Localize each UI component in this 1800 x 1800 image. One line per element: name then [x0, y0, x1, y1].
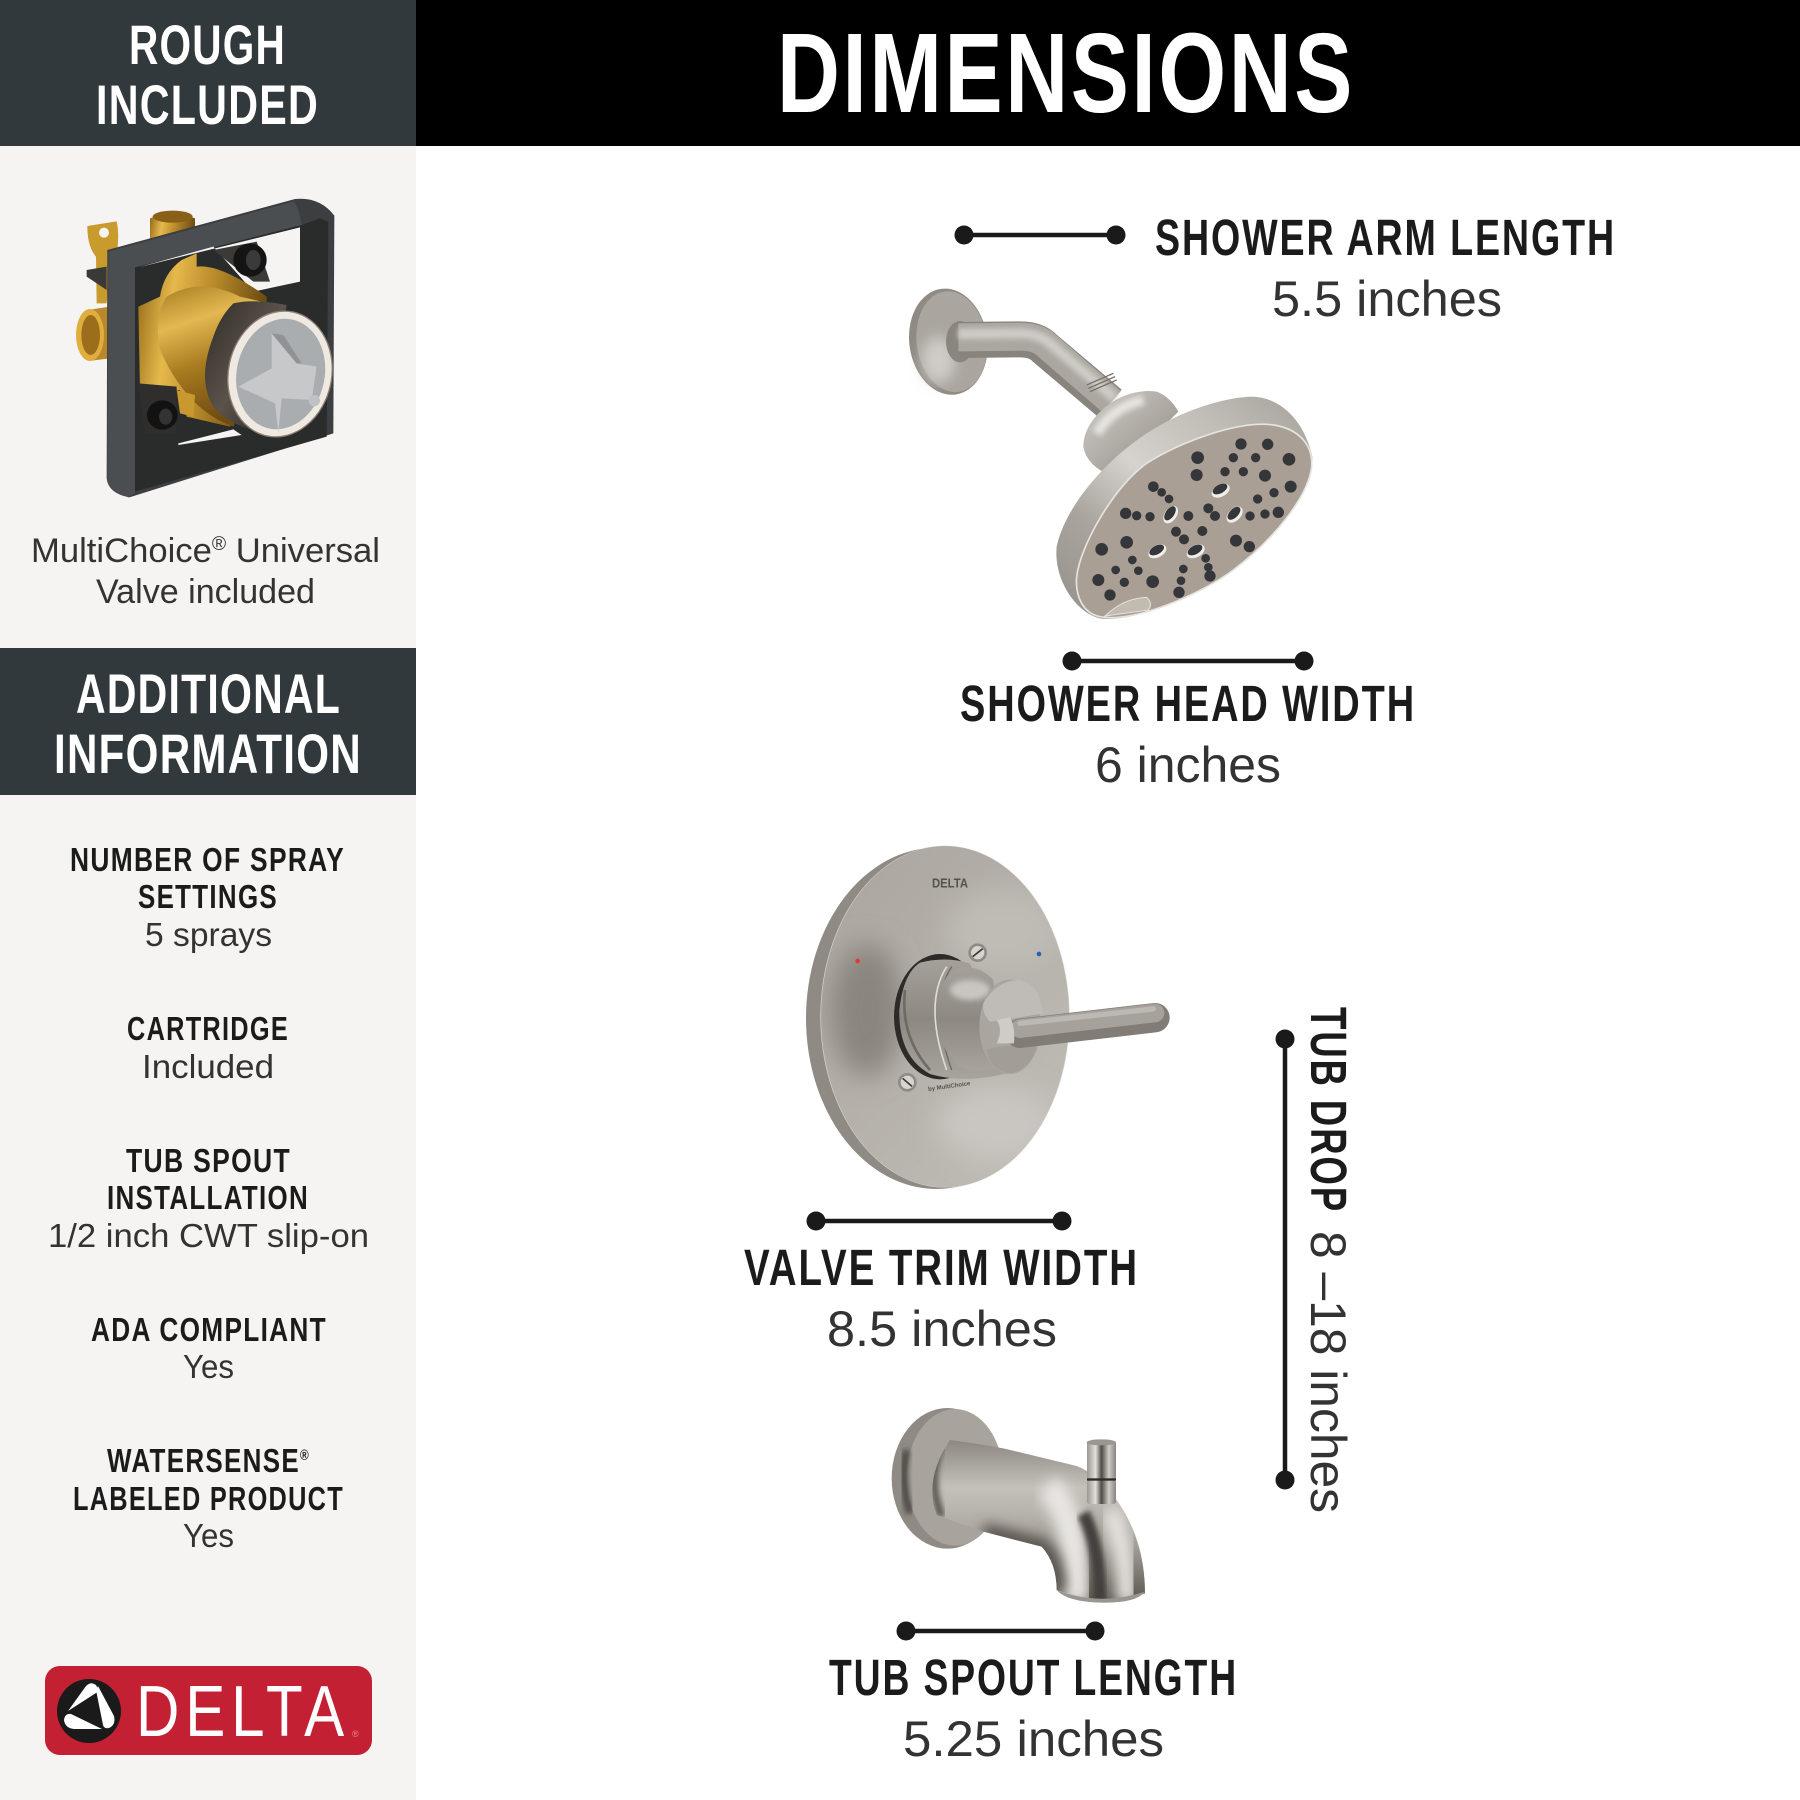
spec: ADA compliant [91, 1311, 327, 1385]
dimension line: shower head width [1062, 652, 1314, 670]
label: shower head width [960, 675, 1416, 793]
heading: ROUGH INCLUDED: INCLUDED [96, 73, 319, 136]
title bar: DIMENSIONS: DIMENSIONS [777, 10, 1355, 136]
spec: WaterSense labeled product: LABELED PRODUCT [73, 1480, 344, 1517]
dimension line: valve trim width [806, 1212, 1072, 1230]
logo: Delta: DELTA [136, 1672, 350, 1752]
caption: MultiChoice Universal Valve included: Valve included [96, 573, 315, 611]
image: shower head and arm [902, 283, 1312, 619]
heading: ROUGH INCLUDED [0, 0, 416, 146]
spec: tub spout installation: TUB SPOUT [126, 1142, 291, 1179]
spec: WaterSense labeled product: WATERSENSE [107, 1442, 352, 1479]
dimension line: shower arm length [954, 226, 1126, 244]
panel: left sidebar [0, 0, 416, 1800]
title bar: DIMENSIONS [416, 0, 1800, 146]
spec: WaterSense labeled product: Yes [183, 1517, 234, 1554]
spec: cartridge: CARTRIDGE [127, 1010, 289, 1047]
image: rough-in valve [76, 199, 344, 497]
logo: Delta [45, 1666, 372, 1755]
caption: MultiChoice Universal Valve included: MultiChoice [31, 532, 209, 570]
label: valve trim width [744, 1239, 1139, 1357]
spec: WaterSense labeled product: ® [300, 1447, 310, 1464]
label: shower head width: 6 inches [1095, 737, 1281, 793]
image: valve trim with lever handle [806, 846, 1155, 1189]
heading: ROUGH INCLUDED: ROUGH [129, 13, 286, 76]
caption: MultiChoice Universal Valve included: ® [212, 534, 226, 555]
label: shower head width: SHOWER HEAD WIDTH [960, 675, 1416, 732]
spec: cartridge [127, 1010, 289, 1085]
label: shower arm length: 5.5 inches [1272, 271, 1502, 327]
spec: number of spray settings: NUMBER OF SPRAY [70, 841, 345, 878]
label: tub drop [1300, 1007, 1357, 1513]
heading: ADDITIONAL INFORMATION: INFORMATION [54, 722, 362, 785]
caption: MultiChoice Universal Valve included: Universal [226, 532, 380, 570]
heading: ADDITIONAL INFORMATION: ADDITIONAL [76, 662, 341, 725]
label: valve trim width: VALVE TRIM WIDTH [744, 1239, 1139, 1296]
spec: ADA compliant: Yes [183, 1348, 234, 1385]
spec: tub spout installation: INSTALLATION [107, 1179, 309, 1216]
dimension line: tub spout length [896, 1622, 1104, 1640]
spec: number of spray settings: 5 sprays [145, 916, 272, 953]
image: valve trim with lever handle: by MultiChoice [928, 1081, 971, 1093]
spec: number of spray settings: SETTINGS [138, 878, 278, 915]
caption: MultiChoice Universal Valve included [31, 532, 380, 611]
image: valve trim with lever handle: DELTA [932, 875, 968, 890]
label: tub spout length: 5.25 inches [903, 1711, 1164, 1767]
label: tub spout length [829, 1649, 1238, 1767]
spec: tub spout installation [48, 1142, 369, 1254]
label: tub drop: TUB DROP [1300, 1007, 1357, 1213]
spec: cartridge: Included [142, 1048, 274, 1085]
spec: ADA compliant: ADA COMPLIANT [91, 1311, 327, 1348]
spec: number of spray settings [70, 841, 345, 953]
dimension line: tub drop [1276, 1030, 1294, 1490]
label: shower arm length [1155, 209, 1616, 327]
label: shower arm length: SHOWER ARM LENGTH [1155, 209, 1616, 266]
spec: tub spout installation: 1/2 inch CWT slip-on [48, 1217, 369, 1254]
spec: WaterSense labeled product [73, 1442, 344, 1554]
logo: Delta: ® [352, 1729, 359, 1739]
label: tub spout length: TUB SPOUT LENGTH [829, 1649, 1238, 1706]
heading: ADDITIONAL INFORMATION [0, 648, 416, 795]
label: valve trim width: 8.5 inches [827, 1301, 1057, 1357]
image: tub spout [892, 1408, 1145, 1603]
label: tub drop: 8 –18 inches [1300, 1231, 1356, 1513]
